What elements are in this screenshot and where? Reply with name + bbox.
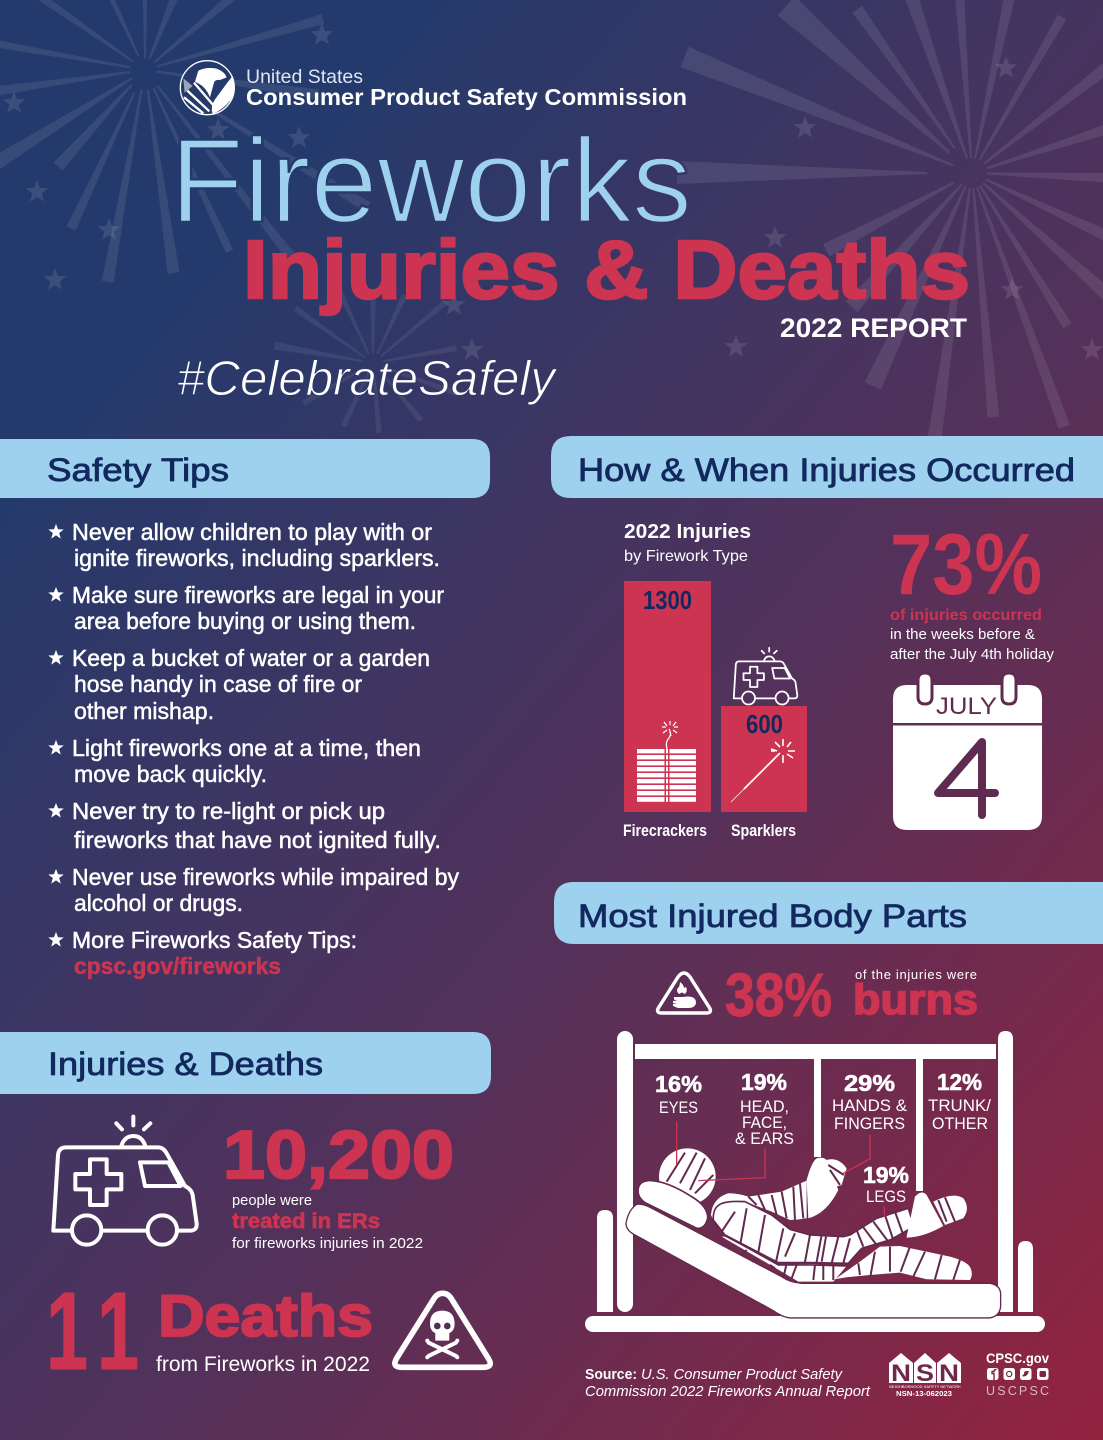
stat: 11 deaths <box>46 1270 373 1393</box>
icon: ambulance small <box>734 648 797 705</box>
stat: 10,200 treated in ERs <box>223 1117 454 1252</box>
label: hands and fingers 29% <box>832 1070 908 1133</box>
pillow <box>638 1181 708 1228</box>
label: head, face, ears 19% <box>735 1069 794 1148</box>
CPSC contact and social icons: USCPSC <box>986 1384 1049 1398</box>
raised foot <box>907 1193 967 1238</box>
label: hands and fingers 29%: HANDS & <box>832 1096 908 1115</box>
hashtag: #CelebrateSafely <box>177 352 558 406</box>
axis labels: Firecrackers <box>623 822 707 840</box>
tip: one at a time <box>48 735 421 787</box>
tip: impaired: Never use fireworks while impaired by <box>72 864 459 890</box>
bar chart: injuries by firework type <box>623 521 807 840</box>
safety tips list <box>48 519 459 979</box>
CPSC contact and social icons <box>986 1350 1049 1398</box>
panel: how and when heading: How & When Injuries Occurred <box>578 452 1075 488</box>
icon: ambulance large <box>53 1117 197 1245</box>
panel: most injured body parts heading: Most Injured Body Parts <box>578 898 967 934</box>
torso and raised leg <box>713 1201 914 1280</box>
label: legs 19%: 19% <box>863 1162 909 1188</box>
label: hands and fingers 29%: FINGERS <box>834 1114 905 1133</box>
label: hands and fingers 29%: 29% <box>844 1070 895 1096</box>
stat: 11 deaths: from Fireworks in 2022 <box>156 1353 370 1376</box>
chart title: by Firework Type <box>624 548 748 565</box>
patient figure <box>626 1122 1001 1318</box>
tip: impaired <box>48 864 459 916</box>
stat: 73 percent: of injuries occurred <box>890 607 1042 624</box>
tip: impaired: alcohol or drugs. <box>74 890 243 916</box>
label: legs 19%: LEGS <box>866 1187 906 1206</box>
label: head, face, ears 19%: HEAD, <box>740 1097 789 1116</box>
firework: right burst <box>677 0 1103 441</box>
stat: 10,200 treated in ERs: treated in ERs <box>232 1210 380 1233</box>
icon: youtube <box>1037 1368 1048 1380</box>
tip: more tips link: cpsc.gov/fireworks <box>74 953 281 979</box>
logo: neighborhood safety network: NSN-13-062023 <box>896 1389 952 1398</box>
icon: burn warning triangle <box>658 973 710 1013</box>
icon: sparkler <box>731 739 795 802</box>
label: trunk other 12% <box>928 1069 991 1133</box>
tip: one at a time: Light fireworks one at a time, then <box>72 735 421 761</box>
panel: most injured body parts heading <box>554 882 1103 944</box>
icon: firecrackers <box>637 721 696 802</box>
tip: legal: area before buying or using them. <box>74 608 416 634</box>
axis labels: Sparklers <box>731 822 796 840</box>
logo: neighborhood safety network: NEIGHBORHOOD SAFETY NETWORK <box>889 1385 962 1389</box>
firework: lower centre burst <box>274 285 459 433</box>
panel: injuries and deaths heading <box>0 1032 491 1094</box>
CPSC logo <box>180 61 687 115</box>
bar: sparklers 600: 600 <box>746 709 783 739</box>
logo: neighborhood safety network: S <box>916 1360 934 1387</box>
panel: injuries and deaths heading: Injuries & Deaths <box>48 1046 323 1082</box>
mattress <box>626 1204 1001 1318</box>
title: Injuries & Deaths: Injuries & Deaths <box>243 223 970 316</box>
tip: legal: Make sure fireworks are legal in your <box>72 582 444 608</box>
tip: more tips link <box>48 927 357 979</box>
lying leg <box>835 1246 972 1280</box>
icon: twitter <box>1020 1368 1032 1380</box>
stat: 11 deaths: 1 <box>97 1270 139 1393</box>
label: trunk other 12%: 12% <box>937 1069 982 1095</box>
tip: one at a time: move back quickly. <box>74 761 267 787</box>
tip: children <box>48 519 440 571</box>
hand <box>807 1158 847 1218</box>
source note: U.S. Consumer Product Safety <box>641 1366 843 1383</box>
panel: how and when heading <box>551 436 1103 498</box>
label: head, face, ears 19%: & EARS <box>735 1129 794 1148</box>
label: eyes 16%: 16% <box>655 1071 702 1097</box>
tip: re-light <box>48 798 441 853</box>
stat: 73 percent <box>890 517 1054 663</box>
label: eyes 16%: EYES <box>659 1098 698 1117</box>
stat: 10,200 treated in ERs: people were <box>232 1192 312 1209</box>
stat: 38 percent burns: of the injuries were <box>855 967 977 982</box>
axis labels <box>623 822 796 840</box>
tip: children: Never allow children to play with or <box>72 519 432 545</box>
tip: water: hose handy in case of fire or <box>74 671 362 697</box>
logo: neighborhood safety network: N <box>891 1360 911 1387</box>
tip: children: ignite fireworks, including sparklers. <box>74 545 440 571</box>
head <box>659 1148 716 1205</box>
label: head, face, ears 19%: FACE, <box>742 1113 787 1132</box>
hip band <box>722 1235 847 1282</box>
label: trunk other 12%: TRUNK/ <box>928 1096 991 1115</box>
stat: 38 percent burns: burns <box>853 976 978 1024</box>
bar: firecrackers 1300 <box>624 581 711 812</box>
subtitle: 2022 report: 2022 REPORT <box>780 313 968 343</box>
stat: 11 deaths: 1 <box>46 1270 88 1393</box>
firework: left burst <box>0 0 372 283</box>
tip: legal <box>48 582 444 634</box>
stat: 73 percent: 73% <box>890 517 1042 613</box>
tip: re-light: Never try to re-light or pick up <box>72 798 385 824</box>
icon: skull warning triangle <box>395 1293 490 1367</box>
bar: firecrackers 1300: 1300 <box>643 585 692 615</box>
title: Fireworks: Fireworks <box>170 114 692 248</box>
chart title: 2022 Injuries <box>624 521 751 543</box>
agency name <box>246 66 687 110</box>
background stars <box>3 23 1103 360</box>
illustration: patient in hospital bed <box>585 1031 1045 1332</box>
CPSC contact and social icons: CPSC.gov <box>986 1350 1049 1366</box>
icon: facebook <box>987 1368 998 1380</box>
stat: 10,200 treated in ERs: 10,200 <box>223 1117 454 1193</box>
stat: 10,200 treated in ERs: for fireworks injuries in 2022 <box>232 1235 423 1252</box>
logo: neighborhood safety network <box>889 1353 962 1398</box>
stat: 73 percent: after the July 4th holiday <box>890 646 1054 663</box>
icon: instagram <box>1004 1368 1015 1380</box>
tip: water <box>48 645 430 724</box>
stat: 11 deaths: Deaths <box>158 1284 373 1349</box>
tip: water: Keep a bucket of water or a garden <box>72 645 430 671</box>
raised arm <box>711 1181 807 1220</box>
stat: 73 percent: in the weeks before & <box>890 626 1035 643</box>
label: trunk other 12%: OTHER <box>932 1114 988 1133</box>
label: head, face, ears 19%: 19% <box>741 1069 787 1095</box>
icon: CPSC eagle seal <box>180 61 235 115</box>
panel: safety tips heading: Safety Tips <box>47 452 229 488</box>
bar: sparklers 600 <box>721 706 807 812</box>
agency name: United States <box>246 66 363 88</box>
stat: 38 percent burns <box>725 961 978 1029</box>
red leader lines <box>677 1122 884 1217</box>
tip: water: other mishap. <box>74 698 214 724</box>
label: eyes 16% <box>655 1071 702 1117</box>
bed frame <box>585 1031 1045 1332</box>
stat: 38 percent burns: 38% <box>725 961 832 1029</box>
source note <box>585 1366 871 1400</box>
tip: re-light: fireworks that have not ignited fully. <box>74 827 441 853</box>
source note: Commission 2022 Fireworks Annual Report <box>585 1383 871 1400</box>
icon: July 4 calendar: JULY <box>936 693 997 720</box>
label: legs 19% <box>863 1162 909 1206</box>
chart title <box>624 521 751 565</box>
source note: Source: <box>585 1366 637 1383</box>
tip: more tips link: More Fireworks Safety Tips: <box>72 927 357 953</box>
logo: neighborhood safety network: N <box>939 1360 959 1387</box>
panel: safety tips heading <box>0 439 490 498</box>
agency name: Consumer Product Safety Commission <box>246 84 687 110</box>
icon: July 4 calendar <box>893 673 1042 830</box>
